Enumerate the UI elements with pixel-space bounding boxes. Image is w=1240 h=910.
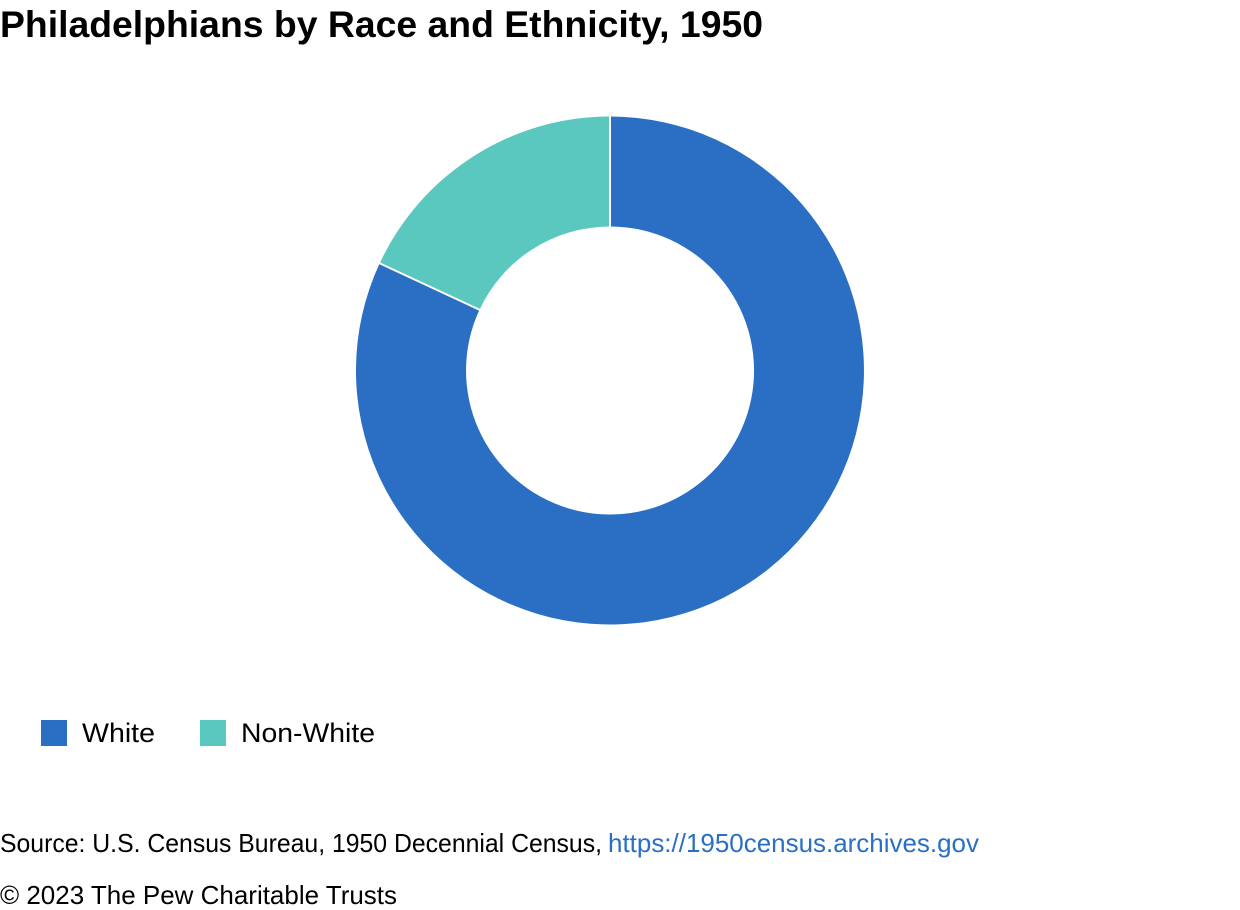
title: Philadelphians by Race and Ethnicity, 1950 (0, 4, 763, 45)
segment: White (356, 116, 864, 624)
source note: https://1950census.archives.gov (608, 828, 979, 858)
legend item: White (41, 718, 155, 748)
legend item: Non-White: Non-White (241, 718, 375, 748)
donut chart (356, 116, 864, 624)
source note: Source: U.S. Census Bureau, 1950 Decennial Census, (0, 828, 602, 858)
source note (0, 828, 979, 858)
segment: Non-White (380, 116, 610, 310)
legend (41, 718, 375, 748)
copyright: © 2023 The Pew Charitable Trusts (0, 880, 397, 910)
legend item: White: White (82, 718, 155, 748)
